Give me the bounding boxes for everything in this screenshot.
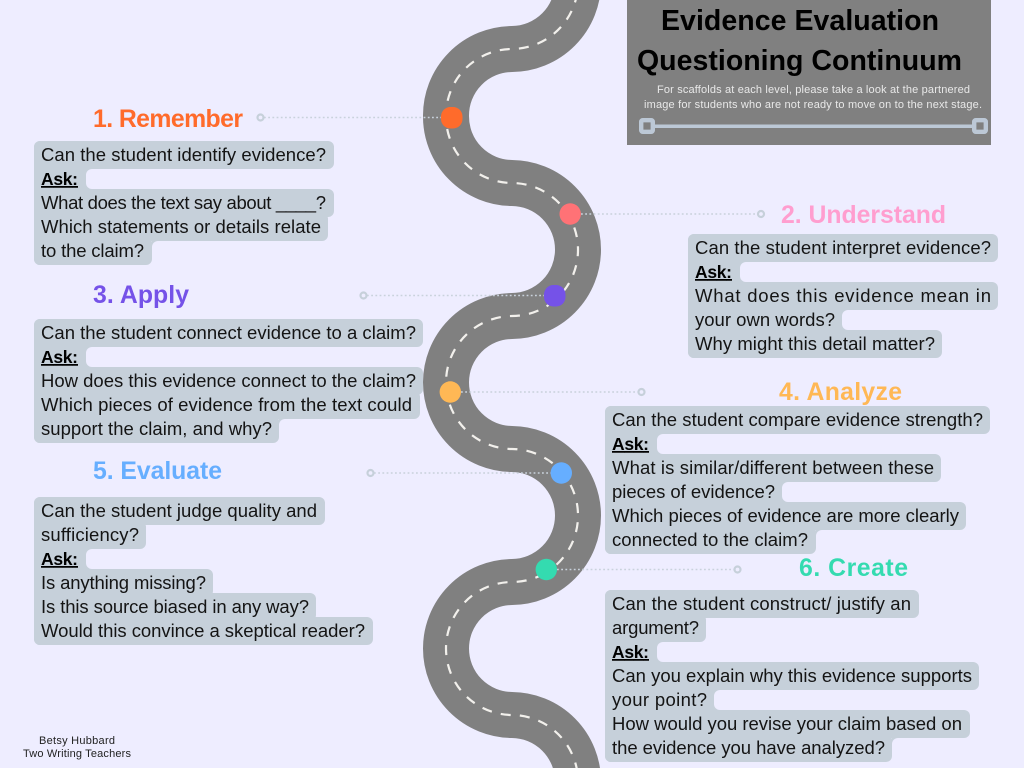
heading: 2. Understand: 2. Understand [781,202,946,229]
title: Questioning Continuum [637,45,962,77]
panel: evaluate questions: Ask: [41,549,78,569]
stop marker: 4 [440,381,461,403]
panel: understand questions: What does this evidence mean in [695,285,991,306]
heading: 6. Create: 6. Create [799,555,908,582]
heading: 5. Evaluate: 5. Evaluate [93,458,222,485]
credit [23,735,132,760]
subtitle: For scaffolds at each level, please take a look at the partnered [657,84,970,96]
panel: analyze questions [605,406,990,554]
panel: analyze questions: Which pieces of evidence are more clearly [612,505,960,526]
panel: create questions [605,590,979,762]
heading: 4. Analyze: 4. Analyze [779,379,902,406]
heading: 1. Remember: 1. Remember [93,106,243,133]
header panel [627,0,991,145]
panel: evaluate questions: Is anything missing? [41,572,206,593]
leader line: 1 [258,114,441,120]
panel: apply questions: Which pieces of evidence from the text could [41,394,412,415]
stop marker: 6 [536,559,557,580]
leader line: 4 [461,389,644,395]
panel: understand questions: Why might this detail matter? [695,333,935,354]
credit: Betsy Hubbard [39,735,115,747]
panel: evaluate questions: Would this convince a skeptical reader? [41,620,365,641]
panel: understand questions: Can the student interpret evidence? [695,237,991,258]
winding road [446,0,587,768]
leader line: 3 [360,292,544,298]
panel: apply questions: support the claim, and why? [41,418,272,439]
panel: apply questions [34,319,423,443]
panel: evaluate questions: sufficiency? [41,524,139,545]
leader line: 5 [368,470,551,476]
panel: remember questions: What does the text say about ____? [41,192,326,214]
subtitle [644,84,982,111]
panel: create questions: Ask: [612,642,649,662]
panel: analyze questions: Can the student compare evidence strength? [612,409,983,430]
panel: create questions: Can you explain why this evidence supports [612,665,972,686]
stop marker: 3 [544,285,566,306]
stop marker: 1 [441,107,462,128]
panel: understand questions [688,234,998,358]
panel: evaluate questions: Can the student judge quality and [41,500,317,521]
title: Evidence Evaluation [661,5,939,37]
panel: apply questions: Can the student connect evidence to a claim? [41,322,416,343]
panel: analyze questions: connected to the claim? [612,529,808,550]
panel: apply questions: Ask: [41,347,78,367]
title [637,5,962,77]
panel: understand questions: Ask: [695,262,732,282]
panel: remember questions: Can the student identify evidence? [41,144,326,165]
leader line: 2 [581,211,764,217]
stop marker: 5 [551,462,572,484]
panel: create questions: How would you revise your claim based on [612,713,962,734]
panel: analyze questions: What is similar/different between these [612,457,934,478]
stop marker: 2 [560,203,581,225]
panel: understand questions: your own words? [695,309,835,330]
subtitle: image for students who are not ready to move on to the next stage. [644,99,982,111]
panel: analyze questions: pieces of evidence? [612,481,775,502]
panel: analyze questions: Ask: [612,434,649,454]
panel: create questions: argument? [612,617,699,638]
panel: create questions: the evidence you have analyzed? [612,737,885,758]
panel: remember questions: to the claim? [41,240,144,261]
panel: create questions: Can the student construct/ justify an [612,593,911,614]
slider decoration [641,120,986,132]
heading: 3. Apply: 3. Apply [93,282,189,309]
panel: apply questions: How does this evidence connect to the claim? [41,370,416,391]
panel: evaluate questions [34,497,373,645]
panel: create questions: your point? [612,689,707,710]
panel: remember questions [34,141,334,265]
panel: evaluate questions: Is this source biased in any way? [41,596,309,617]
panel: remember questions: Ask: [41,169,78,189]
panel: remember questions: Which statements or details relate [41,216,321,237]
leader line: 6 [557,566,740,572]
credit: Two Writing Teachers [23,748,132,760]
